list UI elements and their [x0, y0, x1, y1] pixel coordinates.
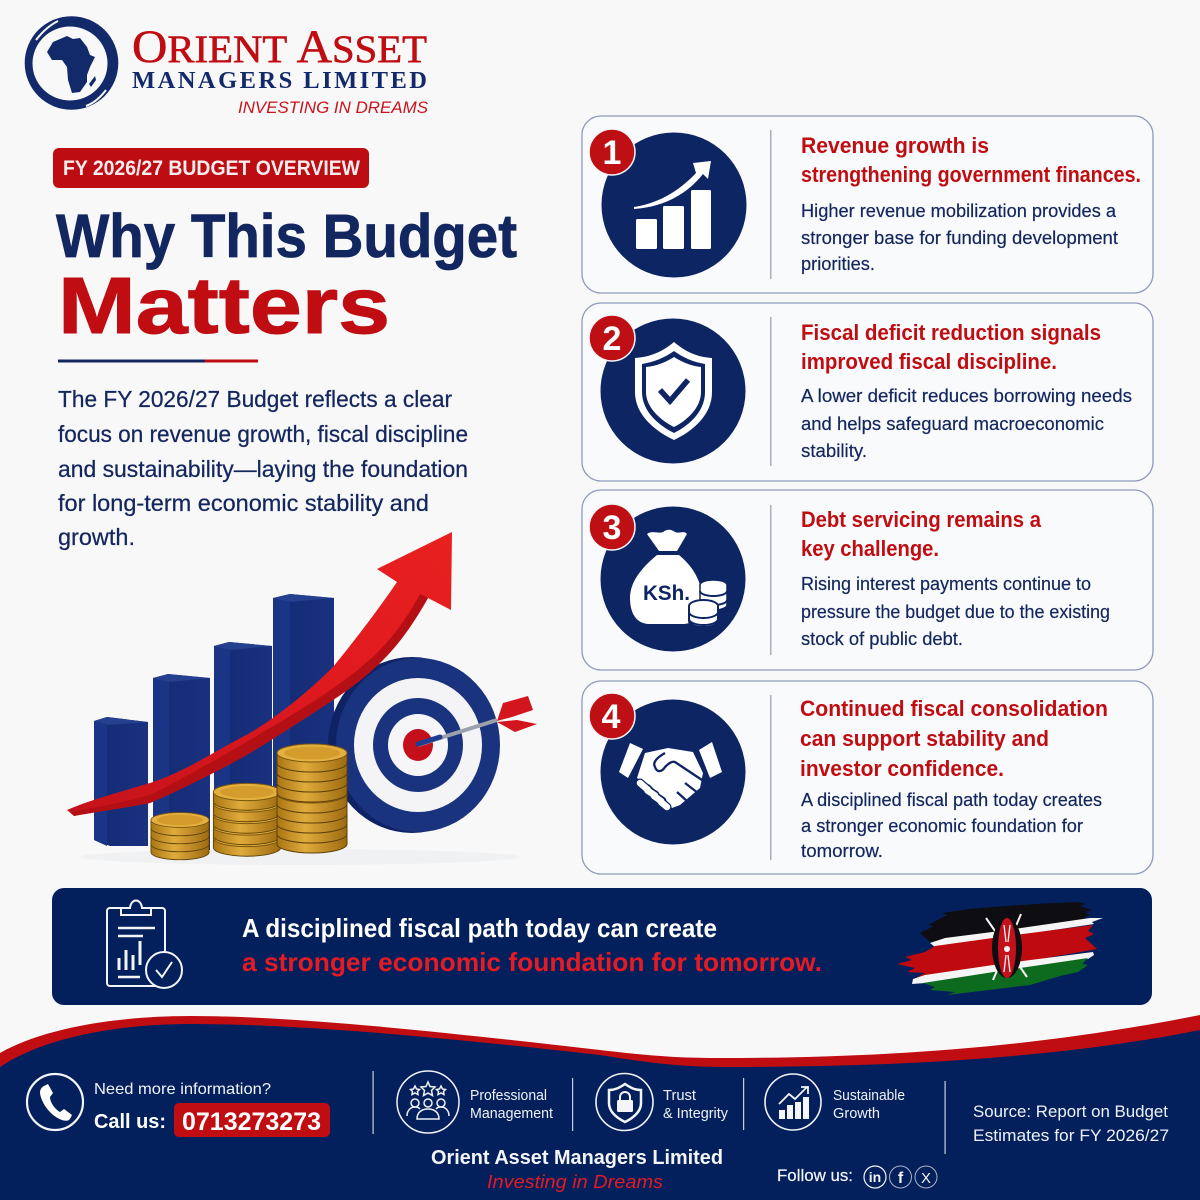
source note: Estimates for FY 2026/27 [973, 1126, 1169, 1145]
illustration: growth bars, arrow, target and coins [67, 532, 537, 865]
icon: handshake [600, 700, 746, 844]
card 1 body: Higher revenue mobilization provides a [801, 201, 1117, 221]
icon: KSh money bag with coins: KSh. [643, 582, 690, 605]
card 1 body: priorities. [801, 254, 875, 274]
icon: team with stars [397, 1071, 459, 1133]
logo tagline: INVESTING IN DREAMS [238, 98, 429, 117]
icon: clipboard with chart and check [107, 900, 182, 988]
feature: professional management [397, 1071, 554, 1133]
red rising arrow [67, 532, 452, 816]
card 2 body: and helps safeguard macroeconomic [801, 414, 1104, 434]
card 3 body: stock of public debt. [801, 629, 963, 649]
card 4 heading: can support stability and [800, 726, 1049, 751]
social links: Follow us: [777, 1166, 853, 1185]
footer company name: Investing in Dreams [487, 1172, 663, 1192]
number badge 1: 1 [603, 134, 621, 172]
icon: KSh money bag with coins [600, 506, 746, 652]
card 3 heading [801, 507, 1042, 561]
card 3 heading: key challenge. [801, 536, 939, 561]
feature: trust and integrity [596, 1074, 728, 1130]
card 1 body [801, 201, 1118, 274]
card 1 heading [801, 133, 1141, 187]
label [470, 1087, 554, 1122]
icon: shield with check [600, 318, 746, 464]
panel: card 1 [582, 116, 1153, 293]
card 1 heading: strengthening government finances. [801, 162, 1141, 187]
heading: Why This Budget Matters: Why This Budget [56, 202, 517, 270]
card 4 body: tomorrow. [801, 841, 883, 861]
logo mark: ring with Africa [25, 16, 118, 110]
icon: rising bar chart [602, 132, 746, 278]
social links [777, 1166, 937, 1188]
icon: growth bars [765, 1074, 821, 1130]
coin stacks [151, 744, 347, 860]
number badge 4: 4 [602, 698, 621, 736]
banner: key takeaway [52, 888, 1152, 1005]
number badge 4 [589, 693, 635, 739]
dart [418, 696, 537, 745]
intro paragraph: for long-term economic stability and [58, 490, 429, 516]
card 2 heading: Fiscal deficit reduction signals [801, 320, 1101, 345]
3D bar chart [94, 594, 334, 850]
card 2 body [801, 386, 1132, 461]
social links: X [921, 1170, 931, 1187]
label: Trust [663, 1087, 697, 1104]
panel: card 3 [582, 490, 1153, 670]
card 3 body [801, 574, 1110, 649]
heading: Why This Budget Matters: Matters [58, 261, 390, 350]
call label: Call us: [94, 1111, 166, 1133]
icon: shield with lock [596, 1074, 653, 1130]
contact prompt: Need more information? [94, 1081, 271, 1098]
label: Growth [833, 1105, 880, 1122]
logo name line 2: MANAGERS LIMITED [132, 67, 427, 94]
social links: f [898, 1170, 904, 1187]
phone number: 0713273273 [182, 1108, 321, 1136]
number badge 3: 3 [603, 509, 621, 547]
card 3 heading: Debt servicing remains a [801, 507, 1042, 532]
card 4 body: a stronger economic foundation for [801, 816, 1083, 836]
intro paragraph: growth. [58, 524, 135, 550]
source note: Source: Report on Budget [973, 1102, 1168, 1121]
intro paragraph: focus on revenue growth, fiscal discipline [58, 421, 468, 447]
banner text: a stronger economic foundation for tomorrow. [242, 947, 822, 977]
icon: Kenya flag brush stroke [897, 902, 1103, 995]
number badge 2: 2 [603, 320, 621, 358]
badge: FY 2026/27 Budget Overview: FY 2026/27 BUDGET OVERVIEW [63, 157, 360, 180]
intro paragraph: The FY 2026/27 Budget reflects a clear [58, 386, 452, 412]
label [833, 1087, 905, 1122]
source note [973, 1102, 1169, 1145]
contact block [27, 1074, 330, 1137]
panel: card 2 [582, 303, 1153, 481]
feature: sustainable growth [765, 1074, 905, 1130]
footer band [0, 1015, 1200, 1200]
number badge 2 [589, 315, 635, 361]
card 4 heading [800, 696, 1108, 781]
banner text: A disciplined fiscal path today can create [242, 913, 717, 943]
label: & Integrity [663, 1105, 728, 1122]
card 2 heading [801, 320, 1101, 374]
card 3 body: pressure the budget due to the existing [801, 602, 1110, 622]
card 2 body: A lower deficit reduces borrowing needs [801, 386, 1132, 406]
panel: card 4 [582, 681, 1153, 874]
number badge 1 [589, 129, 635, 175]
icon: phone [27, 1074, 83, 1130]
card 4 body: A disciplined fiscal path today creates [801, 790, 1102, 810]
card 3 body: Rising interest payments continue to [801, 574, 1091, 594]
heading: Why This Budget Matters [56, 202, 517, 350]
logo: Orient Asset Managers Limited [25, 16, 429, 117]
footer company name: Orient Asset Managers Limited [431, 1147, 723, 1169]
intro paragraph: and sustainability—laying the foundation [58, 456, 468, 482]
card 1 heading: Revenue growth is [801, 133, 989, 158]
label: Professional [470, 1087, 547, 1104]
number badge 3 [589, 504, 635, 550]
label: Sustainable [833, 1087, 905, 1104]
target [328, 657, 500, 833]
card 4 body [801, 790, 1102, 861]
label: Management [470, 1105, 554, 1122]
card 4 heading: Continued fiscal consolidation [800, 696, 1108, 721]
label [663, 1087, 728, 1122]
card 2 body: stability. [801, 441, 867, 461]
card 2 heading: improved fiscal discipline. [801, 349, 1057, 374]
badge: FY 2026/27 Budget Overview [53, 148, 369, 188]
banner text [242, 913, 822, 977]
social links: in [869, 1169, 881, 1185]
card 1 body: stronger base for funding development [801, 228, 1118, 248]
footer company name [431, 1147, 723, 1192]
logo name line 1: ORIENT ASSET [132, 21, 427, 73]
card 4 heading: investor confidence. [800, 756, 1004, 781]
intro paragraph [58, 386, 468, 550]
